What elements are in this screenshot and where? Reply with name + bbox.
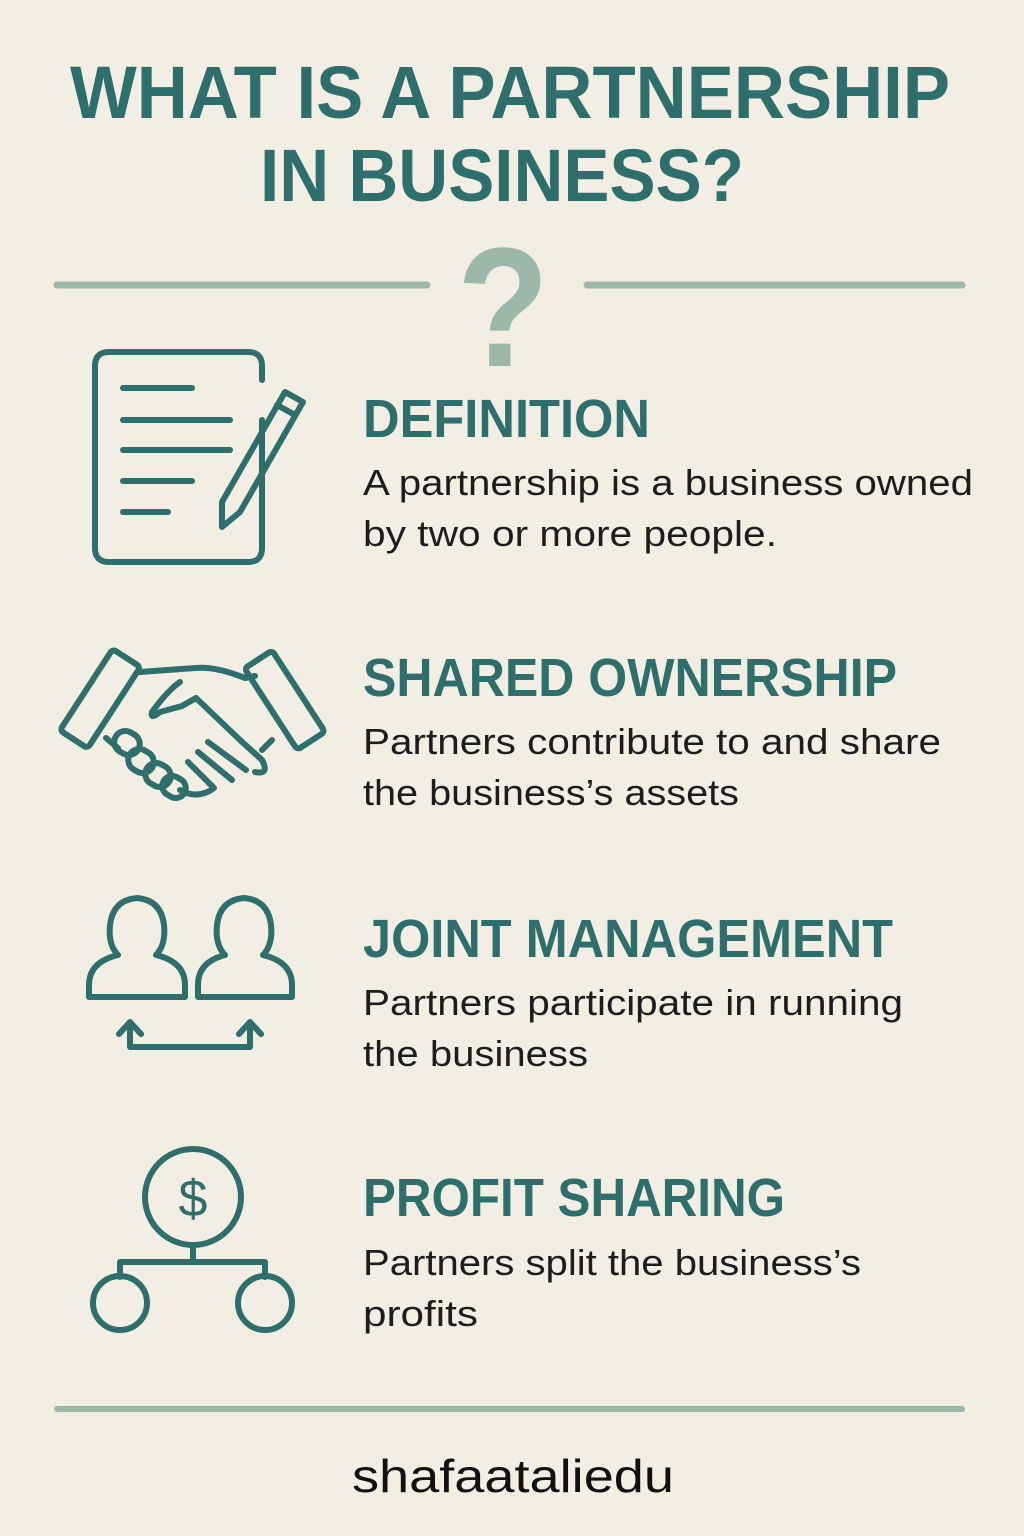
icon: dollar split [93,1149,292,1330]
title: IN BUSINESS? [260,134,744,217]
section: definition: A partnership is a business owned [363,462,973,503]
section: shared ownership: Partners contribute to and share [363,721,941,762]
icon: handshake [60,649,325,802]
section: shared ownership: the business’s assets [363,772,739,813]
section: profit sharing: PROFIT SHARING [363,1168,785,1228]
section: joint management: the business [363,1033,588,1074]
section: definition: by two or more people. [363,513,777,554]
section: definition: DEFINITION [363,389,650,449]
footer: shafaataliedu [352,1450,674,1502]
section: definition [363,389,973,554]
section: joint management [363,909,903,1074]
icon: two people with arrows [89,898,292,1047]
section: profit sharing: Partners split the business’s [363,1242,861,1283]
section: profit sharing [363,1168,861,1334]
icon: dollar split: $ [179,1170,208,1228]
section: joint management: JOINT MANAGEMENT [363,909,893,969]
section: shared ownership [363,648,941,813]
section: shared ownership: SHARED OWNERSHIP [363,648,897,708]
section: joint management: Partners participate in running [363,982,903,1023]
title: WHAT IS A PARTNERSHIP [70,51,950,134]
divider with question mark: ? [457,213,549,403]
section: profit sharing: profits [363,1293,478,1334]
icon: document with pencil [95,352,303,562]
title [70,51,950,217]
